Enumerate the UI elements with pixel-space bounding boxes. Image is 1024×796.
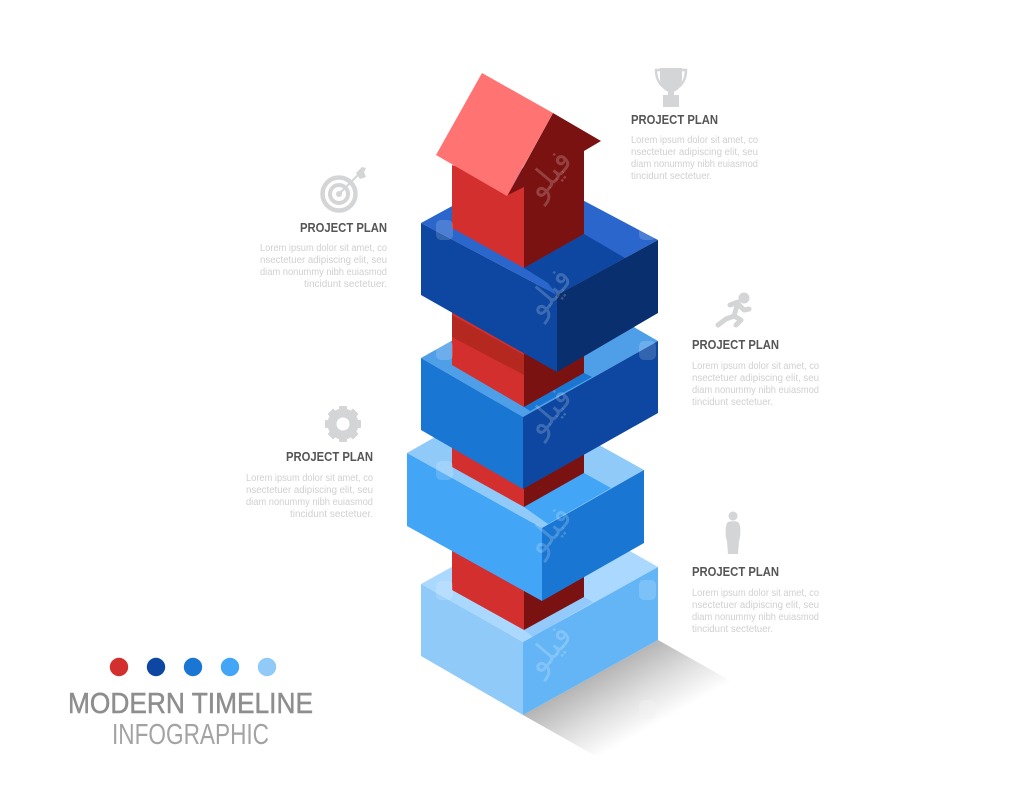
text block: tincidunt sectetuer. bbox=[631, 171, 712, 182]
watermarks bbox=[436, 142, 656, 719]
level 2 box bbox=[421, 168, 658, 372]
text block: tincidunt sectetuer. bbox=[692, 624, 773, 635]
text block: Lorem ipsum dolor sit amet, co bbox=[692, 361, 819, 372]
block: runner project plan bbox=[692, 292, 819, 408]
level 4 box bbox=[407, 395, 644, 601]
arrow shaft segment 3 bbox=[452, 290, 584, 407]
text block: nsectetuer adipiscing elit, seu bbox=[260, 255, 387, 266]
title bbox=[68, 688, 313, 751]
level 5 box bbox=[421, 509, 658, 715]
text block: tincidunt sectetuer. bbox=[290, 509, 373, 520]
level 3 box bbox=[421, 282, 658, 489]
text block: Lorem ipsum dolor sit amet, co bbox=[260, 243, 387, 254]
watermarks: فيلو bbox=[516, 379, 580, 445]
isometric tower bbox=[407, 73, 658, 715]
text block: diam nonummy nibh euiasmod bbox=[631, 159, 758, 170]
watermarks: فيلو bbox=[516, 260, 580, 326]
text block: Lorem ipsum dolor sit amet, co bbox=[631, 135, 758, 146]
text block bbox=[631, 135, 758, 182]
arrow shaft segment 2 bbox=[452, 430, 584, 507]
text block: nsectetuer adipiscing elit, seu bbox=[246, 485, 373, 496]
icon: gear bbox=[325, 406, 361, 442]
icon: target bbox=[322, 167, 366, 210]
heading: PROJECT PLAN bbox=[286, 450, 373, 464]
text block bbox=[692, 588, 819, 635]
text block: nsectetuer adipiscing elit, seu bbox=[692, 373, 819, 384]
text block: nsectetuer adipiscing elit, seu bbox=[692, 600, 819, 611]
heading: PROJECT PLAN bbox=[692, 338, 779, 352]
arrow shaft segment 1 bbox=[452, 500, 584, 630]
watermarks: فيلو bbox=[516, 142, 580, 208]
block: target project plan bbox=[260, 167, 387, 290]
text block: Lorem ipsum dolor sit amet, co bbox=[692, 588, 819, 599]
heading: PROJECT PLAN bbox=[631, 113, 718, 127]
block: person project plan bbox=[692, 512, 819, 635]
watermarks: فيلو bbox=[516, 498, 580, 564]
heading: PROJECT PLAN bbox=[692, 565, 779, 579]
ground shadow bbox=[523, 640, 747, 763]
text block: Lorem ipsum dolor sit amet, co bbox=[246, 473, 373, 484]
text block: diam nonummy nibh euiasmod bbox=[692, 612, 819, 623]
block: gear project plan bbox=[246, 406, 373, 520]
arrow head and top shaft bbox=[436, 73, 601, 268]
icon: runner bbox=[718, 292, 750, 325]
icon: trophy bbox=[656, 68, 686, 107]
text block: diam nonummy nibh euiasmod bbox=[246, 497, 373, 508]
legend dots bbox=[110, 658, 276, 676]
title: MODERN TIMELINE bbox=[68, 688, 313, 720]
text block: diam nonummy nibh euiasmod bbox=[692, 385, 819, 396]
text block: diam nonummy nibh euiasmod bbox=[260, 267, 387, 278]
text block bbox=[260, 243, 387, 290]
heading: PROJECT PLAN bbox=[300, 221, 387, 235]
text block: nsectetuer adipiscing elit, seu bbox=[631, 147, 758, 158]
block: trophy project plan bbox=[631, 68, 758, 182]
text block: tincidunt sectetuer. bbox=[692, 397, 773, 408]
text block bbox=[246, 473, 373, 520]
icon: person bbox=[726, 512, 740, 554]
watermarks: فيلو bbox=[516, 617, 580, 683]
title: INFOGRAPHIC bbox=[112, 719, 269, 751]
text block: tincidunt sectetuer. bbox=[304, 279, 387, 290]
text block bbox=[692, 361, 819, 408]
